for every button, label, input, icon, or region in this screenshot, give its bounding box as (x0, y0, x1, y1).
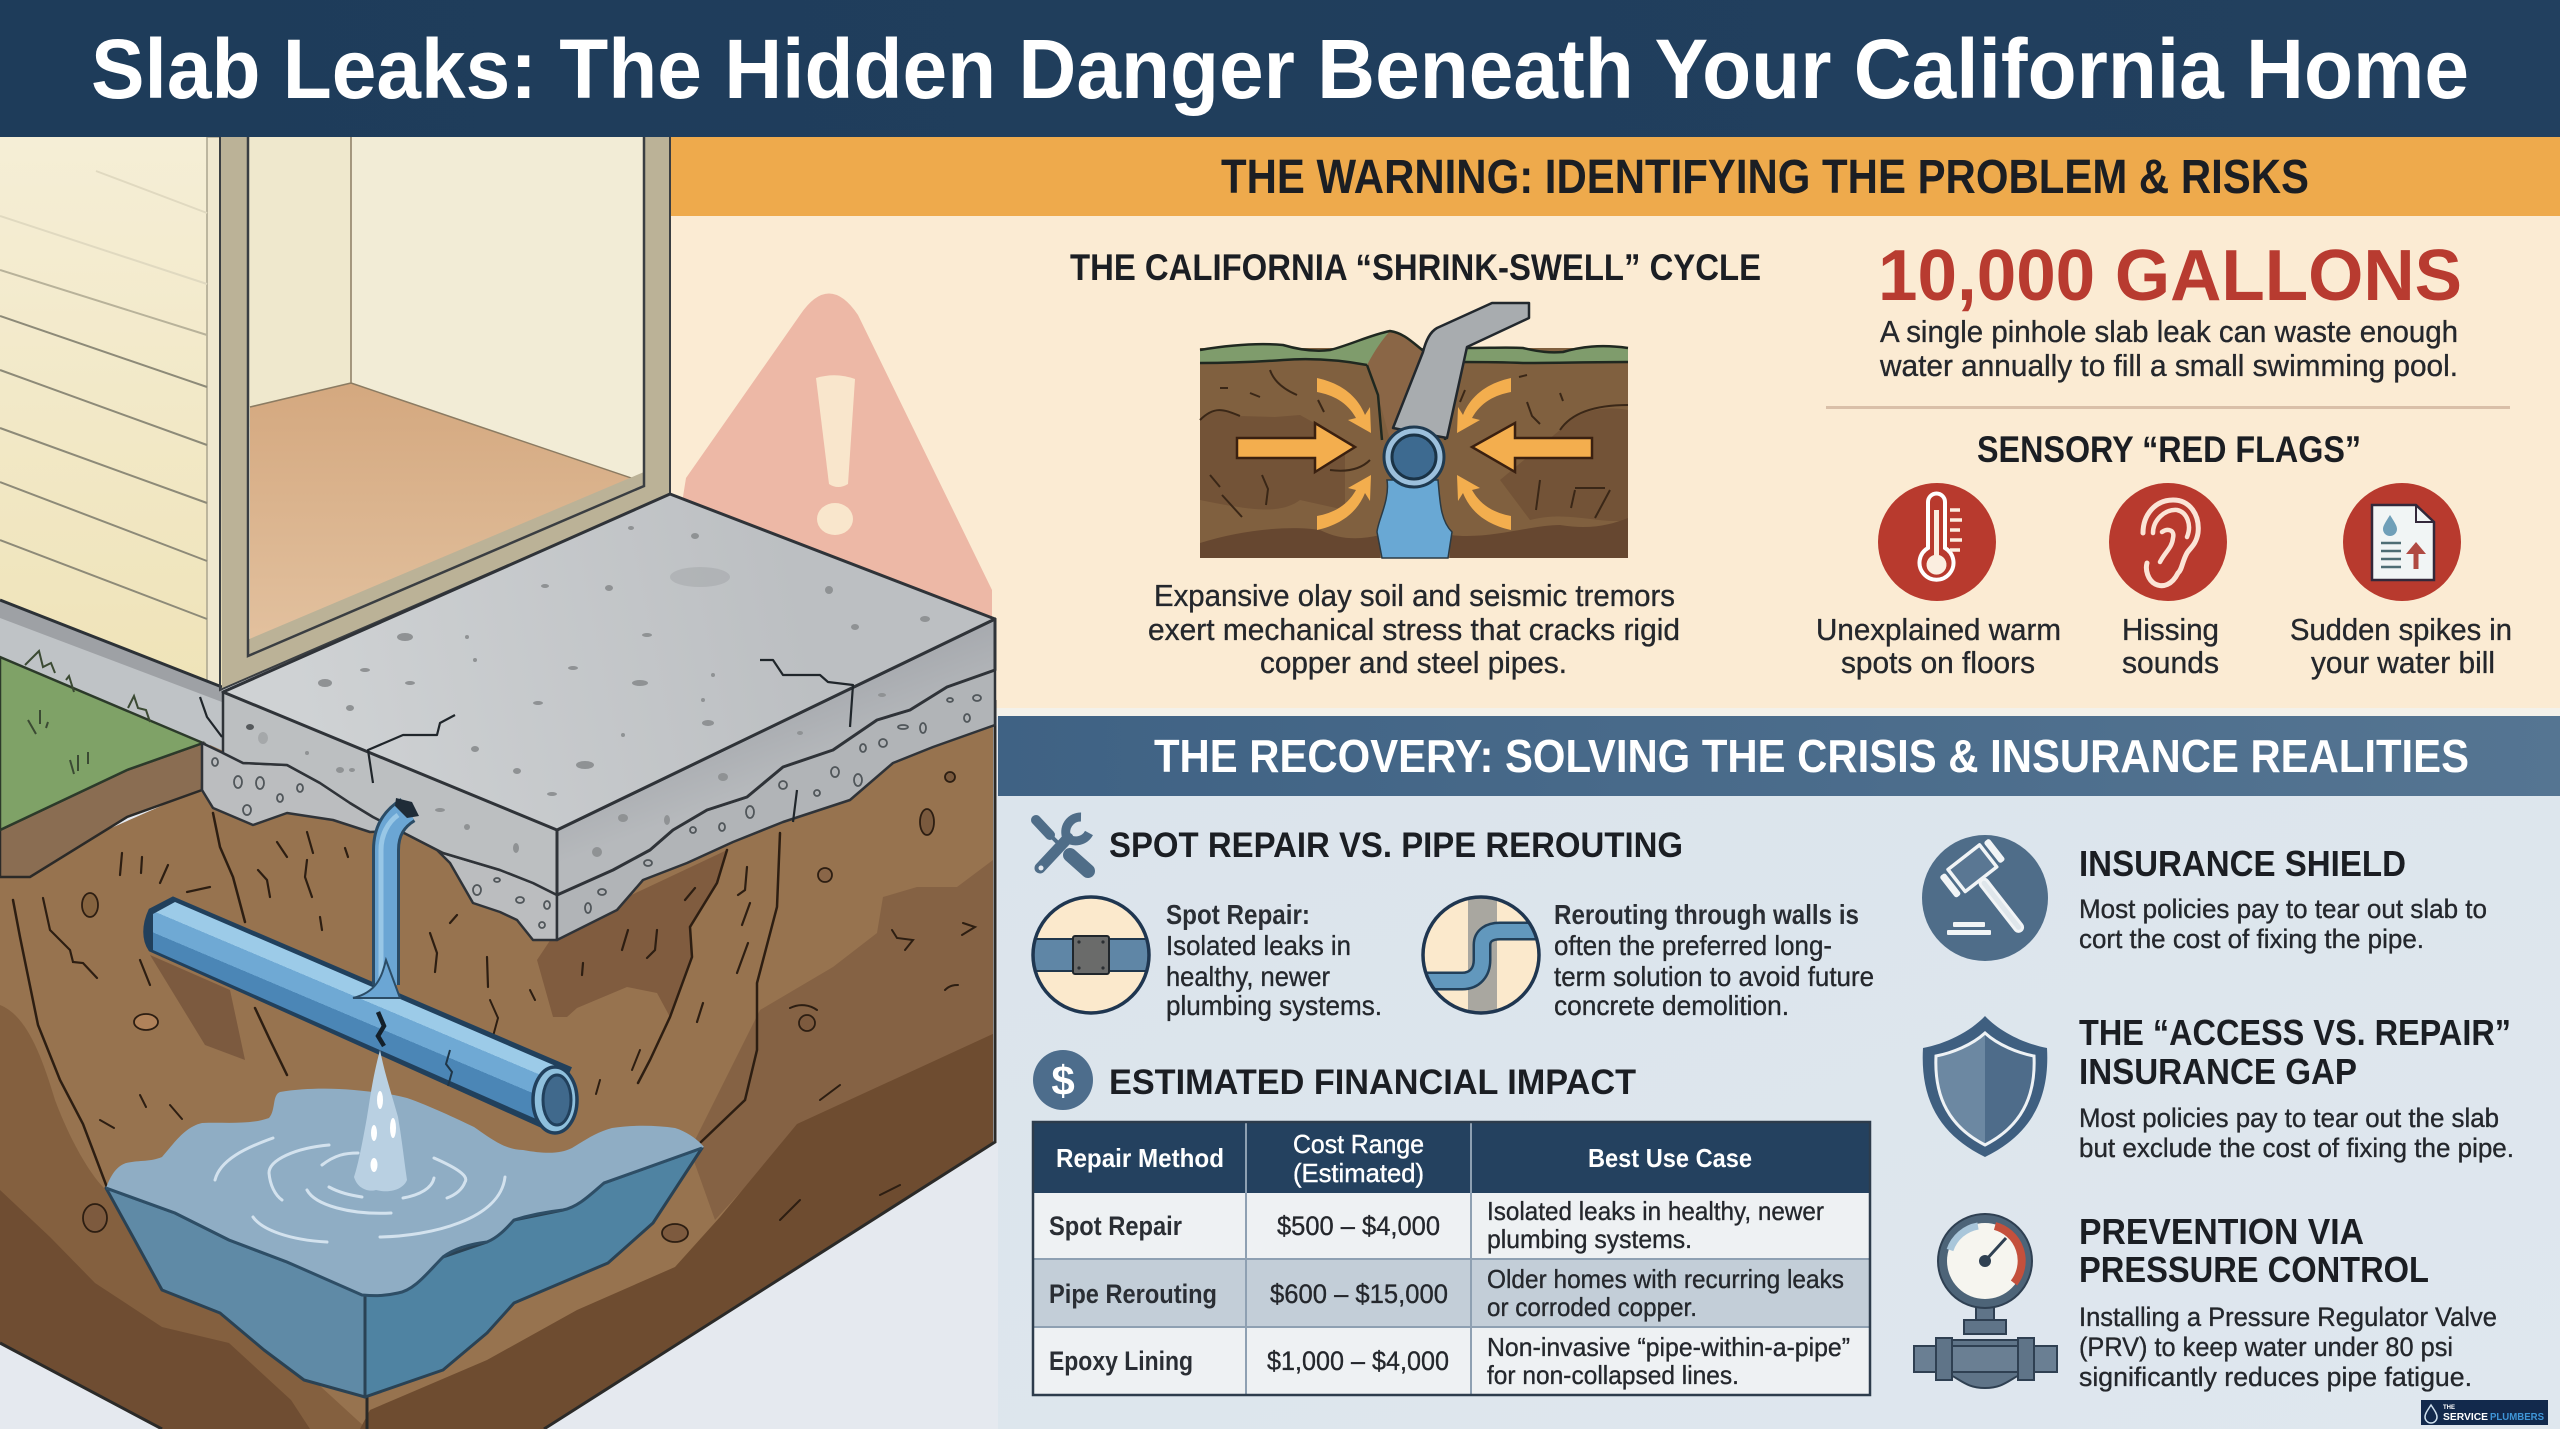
label: hissing sounds (2122, 612, 2219, 680)
icon: shield (1923, 1016, 2047, 1157)
left mid layer (0, 1005, 367, 1429)
soil stones (82, 772, 955, 1242)
prevention text: PREVENTION VIA (2079, 1211, 2364, 1252)
row: spot repair (1049, 1196, 1824, 1254)
stat description: A single pinhole slab leak can waste enough (1880, 314, 2458, 349)
sensory red flags heading: SENSORY “RED FLAGS” (1977, 429, 2361, 470)
access vs repair text: INSURANCE GAP (2079, 1051, 2357, 1092)
shrink-swell heading: THE CALIFORNIA “SHRINK-SWELL” CYCLE (1070, 247, 1761, 288)
logo badge: THE (2443, 1405, 2455, 1411)
access vs repair text (2079, 1012, 2514, 1163)
spot repair text: plumbing systems. (1166, 990, 1382, 1021)
icon: thermometer (1878, 483, 1996, 601)
prevention text: significantly reduces pipe fatigue. (2079, 1362, 2472, 1392)
shrink-swell caption: Expansive olay soil and seismic tremors (1154, 578, 1675, 613)
row: pipe rerouting (1049, 1264, 1844, 1322)
row: pipe rerouting: $600 – $15,000 (1270, 1279, 1448, 1309)
label: water bill spikes: Sudden spikes in (2290, 612, 2512, 647)
row: pipe rerouting: Pipe Rerouting (1049, 1279, 1217, 1309)
row: spot repair: Isolated leaks in healthy, newer (1487, 1196, 1824, 1226)
financial heading: ESTIMATED FINANCIAL IMPACT (1109, 1063, 1636, 1102)
right mid layer (690, 860, 993, 1220)
recovery heading: THE RECOVERY: SOLVING THE CRISIS & INSURANCE REALITIES (1154, 730, 2469, 782)
falling water (354, 1050, 407, 1191)
recovery banner (998, 716, 2560, 796)
header band (0, 0, 2560, 137)
prevention text: Installing a Pressure Regulator Valve (2079, 1302, 2497, 1332)
row: pipe rerouting: or corroded copper. (1487, 1292, 1697, 1322)
spot repair text (1166, 899, 1382, 1021)
access vs repair text: THE “ACCESS VS. REPAIR” (2079, 1012, 2511, 1053)
row: spot repair: plumbing systems. (1487, 1224, 1692, 1254)
insurance shield text: INSURANCE SHIELD (2079, 843, 2406, 884)
foundation strip (0, 600, 223, 755)
icon: spot repair clamp (1030, 897, 1155, 1013)
pool surface edge (106, 1148, 702, 1296)
rough layer pebbles (212, 695, 981, 928)
icon: ear (2109, 483, 2227, 601)
label: warm spots: spots on floors (1841, 645, 2035, 680)
logo badge: PLUMBERS (2490, 1412, 2544, 1423)
label: water bill spikes (2290, 612, 2512, 680)
table header (1056, 1129, 1752, 1188)
label: warm spots (1816, 612, 2061, 680)
window frame (220, 137, 670, 690)
grass and hump (1200, 331, 1628, 518)
row: pipe rerouting: Older homes with recurring leaks (1487, 1264, 1844, 1294)
icon: rerouted pipe (1423, 895, 1540, 1015)
shrink-swell soil illustration (1200, 303, 1628, 558)
prevention text (2079, 1211, 2497, 1392)
rerouting text: Rerouting through walls is (1554, 899, 1859, 930)
curved arrow top-left (1317, 378, 1371, 433)
logo badge: SERVICE (2443, 1412, 2488, 1423)
concrete slab (200, 494, 995, 940)
stat description: water annually to fill a small swimming pool. (1879, 348, 2458, 383)
soil block outline (0, 700, 995, 1429)
warning heading: THE WARNING: IDENTIFYING THE PROBLEM & RISKS (1221, 151, 2309, 204)
grey pipe (1393, 303, 1529, 438)
soil block (0, 700, 995, 1429)
row: spot repair: Spot Repair (1049, 1211, 1182, 1241)
pipe ring (1384, 427, 1444, 487)
water channel (1377, 480, 1452, 558)
stat description (1879, 314, 2458, 383)
repair heading: SPOT REPAIR VS. PIPE REROUTING (1109, 826, 1683, 865)
spot repair text: healthy, newer (1166, 961, 1330, 992)
grass (0, 651, 203, 877)
shrink-swell caption (1148, 578, 1680, 680)
spot repair text: Spot Repair: (1166, 899, 1310, 930)
row: epoxy lining: $1,000 – $4,000 (1267, 1346, 1449, 1376)
siding wall (0, 137, 222, 690)
table header: Cost Range (1293, 1129, 1424, 1159)
row: spot repair: $500 – $4,000 (1277, 1211, 1440, 1241)
ripples (215, 1138, 505, 1242)
compression arrows (1237, 423, 1592, 472)
prevention text: PRESSURE CONTROL (2079, 1249, 2429, 1290)
label: warm spots: Unexplained warm (1816, 612, 2061, 647)
icon: water bill (2343, 483, 2461, 601)
insurance shield text: cort the cost of fixing the pipe. (2079, 924, 2424, 954)
central wedge (537, 850, 727, 1017)
table header: (Estimated) (1293, 1158, 1424, 1188)
panel: recovery background (998, 796, 2560, 1429)
rerouting text: term solution to avoid future (1554, 961, 1874, 992)
table: financial impact (1033, 1122, 1870, 1395)
branch pipe leak (353, 798, 419, 998)
curved arrow bottom-right (1457, 475, 1511, 530)
icon: tools (1036, 817, 1089, 871)
curved arrow bottom-left (1317, 475, 1371, 530)
row: epoxy lining: Epoxy Lining (1049, 1346, 1193, 1376)
soil cracks (13, 813, 975, 1220)
icon: dollar: $ (1051, 1057, 1075, 1104)
room interior (247, 137, 644, 667)
illustration: cutaway of slab leak (0, 137, 995, 1429)
curved arrow top-right (1457, 378, 1511, 433)
label: hissing sounds: Hissing (2122, 612, 2219, 647)
table header: Best Use Case (1588, 1143, 1752, 1173)
shrink-swell caption: copper and steel pipes. (1260, 645, 1567, 680)
aggregate specks (246, 526, 930, 857)
label: water bill spikes: your water bill (2311, 645, 2495, 680)
shrink-swell caption: exert mechanical stress that cracks rigid (1148, 612, 1680, 647)
row: epoxy lining: for non-collapsed lines. (1487, 1360, 1739, 1390)
panel: warning background (671, 216, 2560, 708)
table header: Repair Method (1056, 1143, 1224, 1173)
label: hissing sounds: sounds (2122, 645, 2219, 680)
prevention text: (PRV) to keep water under 80 psi (2079, 1332, 2453, 1362)
pool of water (106, 1089, 704, 1397)
warning triangle (660, 294, 992, 640)
insurance shield text: Most policies pay to tear out slab to (2079, 894, 2487, 924)
warning banner (671, 137, 2560, 216)
rerouting text: concrete demolition. (1554, 990, 1789, 1021)
main pipe (145, 898, 577, 1133)
shadow below the pipe (150, 955, 245, 1060)
icon: pressure gauge (1914, 1214, 2057, 1388)
slab cracks (200, 660, 853, 822)
row: epoxy lining (1049, 1332, 1850, 1390)
rerouting text: often the preferred long- (1554, 930, 1832, 961)
insurance shield text (2079, 843, 2487, 954)
logo badge (2421, 1400, 2548, 1425)
access vs repair text: but exclude the cost of fixing the pipe. (2079, 1133, 2514, 1163)
title: Slab Leaks: The Hidden Danger Beneath Your California Home (91, 22, 2469, 116)
left dark layer (0, 1190, 310, 1429)
right dark layer (360, 1033, 995, 1429)
spot repair text: Isolated leaks in (1166, 930, 1351, 961)
stat: 10,000 gallons: 10,000 GALLONS (1878, 236, 2462, 316)
row: epoxy lining: Non-invasive “pipe-within-a-pipe” (1487, 1332, 1850, 1362)
icon: dollar (1033, 1050, 1093, 1110)
rerouting text (1554, 899, 1874, 1021)
icon: gavel (1922, 835, 2048, 961)
access vs repair text: Most policies pay to tear out the slab (2079, 1103, 2499, 1133)
